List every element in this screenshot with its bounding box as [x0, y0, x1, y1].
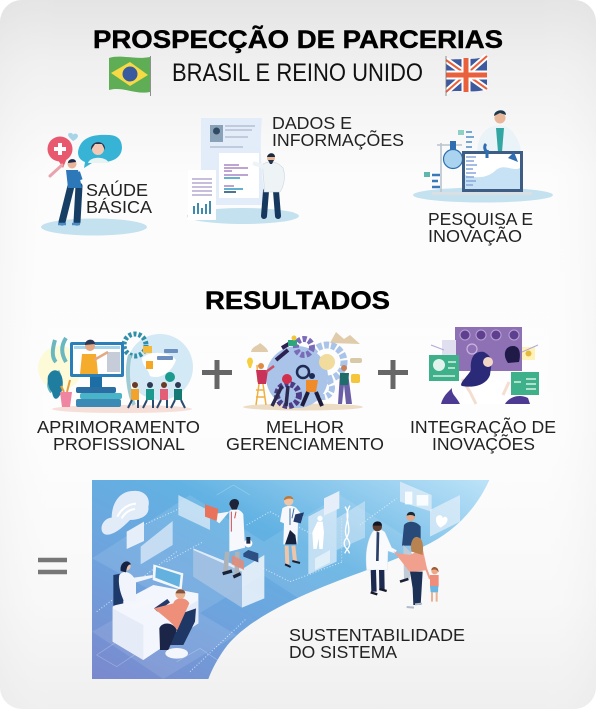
label: Melhor gerenciamento: GERENCIAMENTO	[226, 434, 384, 454]
label: Sustentabilidade do sistema	[289, 625, 465, 662]
label: Sustentabilidade do sistema: DO SISTEMA	[289, 642, 397, 662]
label: Melhor gerenciamento: MELHOR	[266, 417, 344, 437]
illustration: research and innovation	[413, 110, 553, 202]
illustration: professional development	[38, 334, 193, 413]
label: Saúde básica: BÁSICA	[86, 197, 152, 217]
label: Aprimoramento profissional	[37, 417, 200, 454]
care team and family	[366, 512, 439, 608]
label: Integração de inovações	[410, 416, 556, 454]
illustration: primary care	[41, 133, 147, 236]
label: Integração de inovações: INTEGRAÇÃO DE	[410, 416, 556, 437]
illustration: integration of innovations	[429, 327, 539, 404]
label: Dados e informações: DADOS E	[272, 113, 352, 133]
label: Saúde básica	[86, 179, 152, 217]
label: Dados e informações	[272, 113, 404, 150]
standing doctor	[280, 496, 304, 567]
label: Aprimoramento profissional: APRIMORAMENTO	[37, 417, 200, 437]
icon: plus	[378, 360, 408, 389]
central lab bench with doctor	[193, 499, 264, 608]
label: Pesquisa e inovação	[428, 209, 533, 246]
banner: system sustainability illustration	[92, 480, 489, 679]
illustration: data and information	[187, 118, 299, 224]
label: Sustentabilidade do sistema: SUSTENTABILIDADE	[289, 625, 465, 645]
illustration: better management	[243, 332, 363, 410]
icon: equals	[38, 560, 67, 572]
label: Aprimoramento profissional: PROFISSIONAL	[53, 434, 185, 454]
title: PROSPECÇÃO DE PARCERIAS	[93, 24, 503, 54]
desk with doctor and patient	[113, 561, 198, 660]
hologram figure and DNA	[312, 492, 448, 570]
holographic panels	[127, 482, 460, 574]
label: Dados e informações: INFORMAÇÕES	[272, 129, 404, 150]
icon: Brazil flag	[109, 56, 150, 96]
icon: cloud wifi	[102, 491, 149, 535]
label: Integração de inovações: INOVAÇÕES	[432, 433, 535, 454]
icon: UK flag	[446, 56, 487, 96]
heading: results: RESULTADOS	[205, 287, 390, 315]
label: Saúde básica: SAÚDE	[86, 179, 148, 200]
subtitle: BRASIL E REINO UNIDO	[172, 59, 423, 87]
label: Pesquisa e inovação: INOVAÇÃO	[428, 225, 522, 246]
icon: plus	[202, 360, 232, 389]
label: Melhor gerenciamento	[226, 417, 384, 454]
label: Pesquisa e inovação: PESQUISA E	[428, 209, 533, 229]
